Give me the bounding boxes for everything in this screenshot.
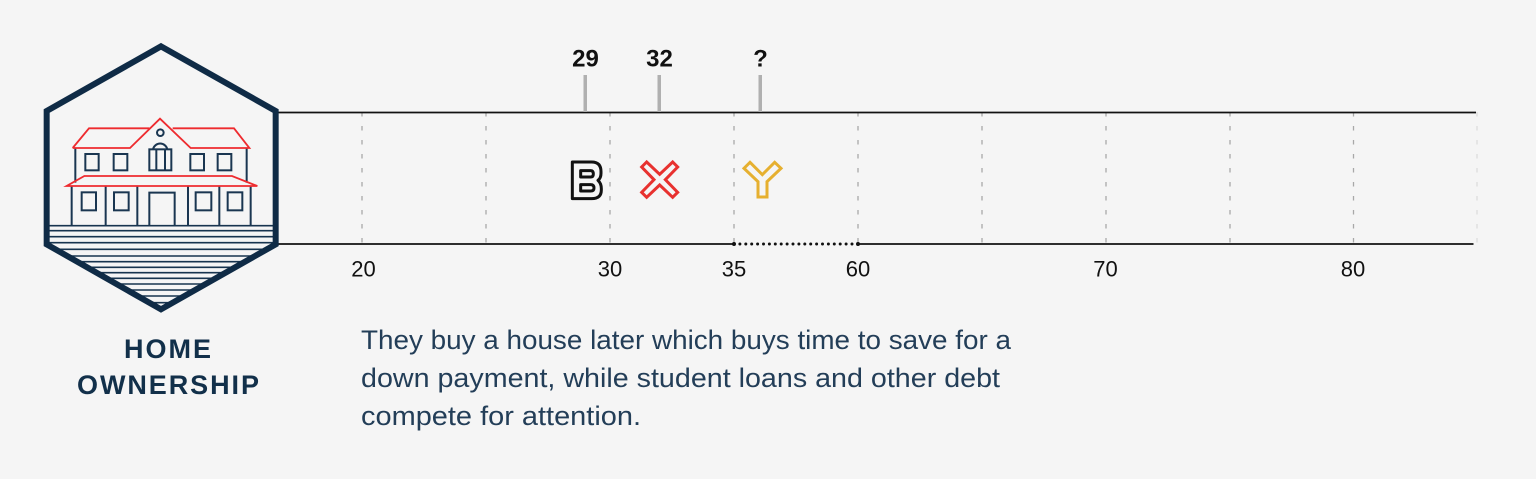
- heading: [77, 334, 259, 400]
- timeline axis: [276, 112, 1476, 246]
- axis labels: 60: [846, 256, 870, 282]
- marker: 29: 29: [572, 46, 599, 72]
- red roofs: [67, 119, 257, 186]
- icon: house in hexagon: [43, 46, 279, 309]
- description text: [361, 325, 1012, 431]
- icon: letter X outline: [642, 162, 678, 197]
- marker: 32: 32: [646, 46, 673, 72]
- marker: 32: [646, 46, 673, 112]
- ground stripes: [43, 226, 279, 303]
- description text: They buy a house later which buys time to save for a: [361, 325, 1012, 355]
- axis labels: [351, 256, 1365, 282]
- axis labels: 80: [1341, 256, 1365, 282]
- icon: letter Y outline: [744, 162, 781, 197]
- axis labels: 35: [722, 256, 746, 282]
- heading: OWNERSHIP: [77, 370, 259, 400]
- infographic: home ownership timeline: [44, 42, 1478, 430]
- axis labels: 30: [598, 256, 622, 282]
- description text: compete for attention.: [361, 401, 641, 431]
- icon: letter B outline: [572, 162, 601, 199]
- description text: down payment, while student loans and other debt: [361, 363, 1001, 393]
- house walls and windows: [72, 129, 251, 225]
- axis labels: 20: [351, 256, 376, 282]
- marker: ?: [753, 46, 768, 112]
- axis labels: 70: [1093, 256, 1118, 282]
- hexagon frame: [47, 46, 276, 309]
- marker: ?: ?: [753, 46, 768, 72]
- heading: HOME: [124, 334, 211, 364]
- marker: 29: [572, 46, 599, 112]
